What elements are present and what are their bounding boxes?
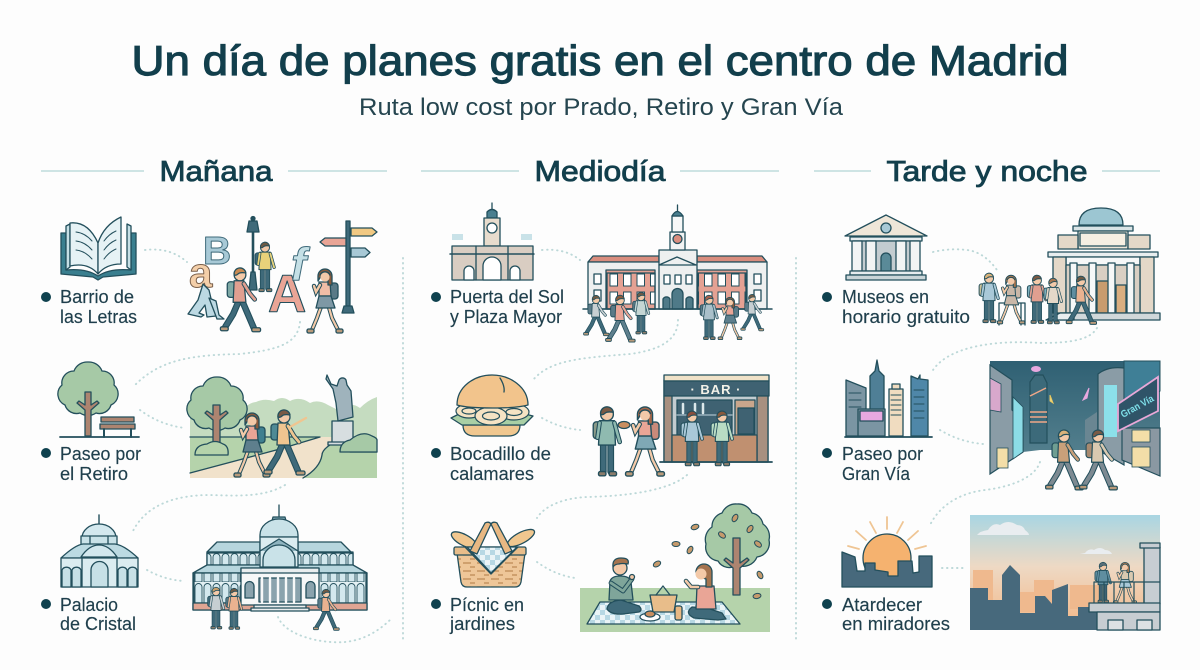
label: Paseo por Gran Vía: Gran Vía <box>842 464 911 484</box>
tree <box>652 504 769 599</box>
label: Bocadillo de calamares <box>431 444 551 484</box>
lamp post <box>247 216 259 290</box>
visitors <box>208 587 224 629</box>
icon: Palacio de Cristal <box>61 515 138 587</box>
label: Palacio de Cristal <box>41 595 136 634</box>
label: Barrio de las Letras: las Letras <box>60 307 137 327</box>
neon sign <box>1118 377 1158 431</box>
letters <box>188 230 311 324</box>
label: Paseo por Gran Vía <box>822 444 923 484</box>
person standing <box>255 242 274 292</box>
subtitle: Ruta low cost por Prado, Retiro y Gran Vía <box>359 94 844 121</box>
panel: Mediodía <box>431 156 772 634</box>
letters: a <box>189 249 213 296</box>
woman sitting <box>686 564 726 620</box>
label: Puerta del Sol y Plaza Mayor <box>431 287 564 327</box>
icon: open book <box>61 217 136 280</box>
label: Barrio de las Letras: Barrio de <box>60 287 134 307</box>
label: Pícnic en jardines: jardines <box>449 614 515 634</box>
heading: Mediodía: Mediodía <box>534 156 666 188</box>
label: Paseo por el Retiro <box>41 444 141 484</box>
person walking with backpack <box>220 268 261 332</box>
woman walking <box>307 269 343 333</box>
icon: Gran Vía skyline <box>845 360 932 437</box>
tree <box>187 377 377 455</box>
icon: picnic basket <box>449 522 537 587</box>
neon sign: Gran Vía <box>1119 393 1156 421</box>
tourists group right <box>700 294 764 340</box>
letters: f <box>291 238 311 290</box>
label: Puerta del Sol y Plaza Mayor: Puerta del Sol <box>450 287 564 307</box>
illustration: Casa de Correos building and people <box>583 205 772 342</box>
man pointing <box>264 410 306 475</box>
route dotted connectors <box>132 250 392 642</box>
couple on balcony <box>1095 562 1110 603</box>
statue on pedestal <box>326 375 356 445</box>
illustration: Palacio de Cristal scene <box>193 505 367 630</box>
visitor on the right <box>313 589 339 630</box>
sandwich in hand <box>618 422 630 428</box>
tourists group left <box>584 292 649 342</box>
label: Pícnic en jardines: Pícnic en <box>450 595 524 615</box>
route dotted connectors <box>930 249 1097 568</box>
illustration: Barrio de las Letras street <box>188 216 377 333</box>
panel: Mañana <box>41 156 392 642</box>
heading: Tarde y noche: Tarde y noche <box>886 156 1088 188</box>
label: Atardecer en miradores <box>822 595 950 634</box>
man sitting <box>607 558 641 614</box>
label: Palacio de Cristal: Palacio <box>60 595 118 615</box>
woman on balcony <box>1113 562 1137 603</box>
bar sign: · BAR · <box>690 382 742 397</box>
label: Puerta del Sol y Plaza Mayor: y Plaza Mayor <box>450 307 562 327</box>
walkers <box>1046 430 1083 490</box>
letters: A <box>268 265 306 324</box>
illustration: picnic scene <box>580 504 770 632</box>
icon: bocadillo de calamares <box>451 375 533 436</box>
label: Museos en horario gratuito: Museos en <box>842 287 929 307</box>
icon: Puerta del Sol <box>450 203 534 280</box>
woman walking <box>234 413 270 477</box>
queue of visitors <box>979 273 1097 325</box>
second walker <box>1080 430 1117 490</box>
illustration: museum queue <box>979 208 1160 325</box>
blanket <box>587 602 740 624</box>
visitor pointing <box>226 588 242 629</box>
label: Paseo por el Retiro: el Retiro <box>60 464 128 484</box>
customers at bar <box>681 411 702 466</box>
icon: sunset over city <box>842 517 932 587</box>
label: Museos en horario gratuito <box>822 287 970 327</box>
label: Palacio de Cristal: de Cristal <box>60 614 136 634</box>
balcony railing and building <box>1089 582 1160 630</box>
label: Barrio de las Letras <box>41 287 137 327</box>
woman eating <box>626 407 664 476</box>
illustration: Retiro park scene <box>187 375 377 478</box>
label: Atardecer en miradores: Atardecer <box>842 595 922 615</box>
label: Pícnic en jardines <box>431 595 524 634</box>
label: Museos en horario gratuito: horario gratuito <box>842 307 970 327</box>
letters: B <box>203 230 231 273</box>
title: Un día de planes gratis en el centro de Madrid <box>132 37 1068 84</box>
icon: tree and bench <box>58 362 139 437</box>
illustration: Gran Vía at night <box>990 361 1160 490</box>
basket, plate and bottle <box>640 586 682 621</box>
bar front <box>660 375 772 462</box>
panel: Tarde y noche <box>822 156 1160 634</box>
signpost <box>320 221 377 313</box>
label: Paseo por el Retiro: Paseo por <box>60 444 141 464</box>
illustration: bar with people <box>593 375 772 476</box>
illustration: sunset view from balcony <box>970 515 1160 630</box>
man eating <box>593 407 620 476</box>
label: Bocadillo de calamares: calamares <box>450 464 534 484</box>
heading: Mañana: Mañana <box>160 156 273 188</box>
label: Bocadillo de calamares: Bocadillo de <box>450 444 551 464</box>
icon: museum <box>845 215 927 280</box>
route dotted connectors <box>533 250 687 578</box>
label: Paseo por Gran Vía: Paseo por <box>842 444 923 464</box>
label: Atardecer en miradores: en miradores <box>842 614 950 634</box>
